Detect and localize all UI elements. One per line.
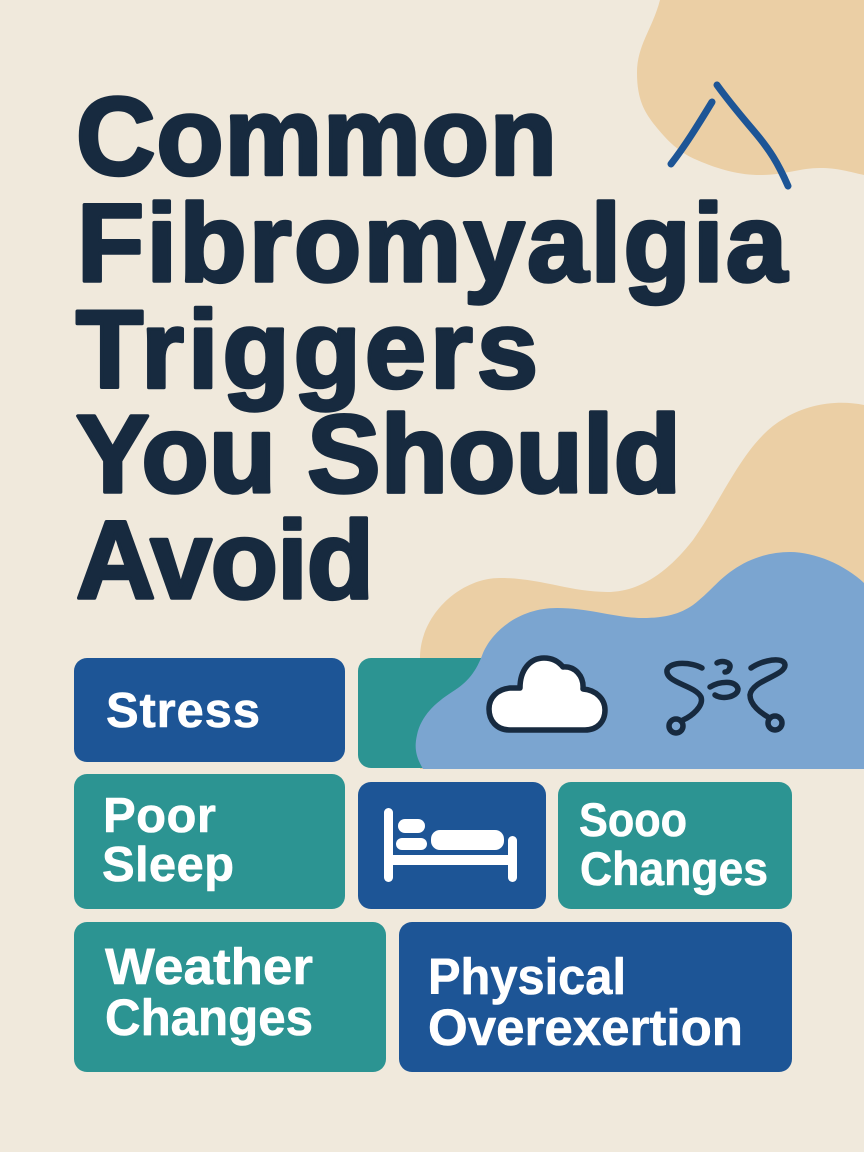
panel: physical overexertion: Physical xyxy=(428,948,626,1005)
icon: bed xyxy=(384,808,517,882)
panel: unlabelled teal box xyxy=(358,658,508,768)
title: Common xyxy=(76,76,557,198)
panel: weather changes xyxy=(74,922,386,1072)
panel: stress: Stress xyxy=(106,684,260,738)
icon: squiggle symbol xyxy=(667,660,785,733)
panel: stress xyxy=(74,658,345,762)
panel: weather changes: Changes xyxy=(105,989,313,1046)
background blob: blue xyxy=(416,552,864,769)
panel: sooo changes: Sooo xyxy=(579,793,687,846)
background blob: lower right tan xyxy=(420,403,864,769)
background blob: top right tan xyxy=(637,0,864,175)
title: Fibromyalgia xyxy=(77,182,788,305)
panel: poor sleep: Poor xyxy=(103,789,216,843)
panel: physical overexertion: Overexertion xyxy=(428,999,743,1056)
panel: sooo changes: Changes xyxy=(580,842,768,895)
panel: poor sleep xyxy=(74,774,345,909)
title: Avoid xyxy=(76,499,374,622)
icon: cloud xyxy=(489,658,605,730)
panel: bed icon xyxy=(358,782,546,909)
title: Triggers xyxy=(76,288,538,412)
title xyxy=(76,76,788,622)
panel: weather changes: Weather xyxy=(105,938,313,995)
icon: decorative blue arrow strokes xyxy=(671,85,788,186)
title: You Should xyxy=(76,393,681,516)
panel: poor sleep: Sleep xyxy=(102,838,234,892)
panel: sooo changes xyxy=(558,782,792,909)
panel: physical overexertion xyxy=(399,922,792,1072)
